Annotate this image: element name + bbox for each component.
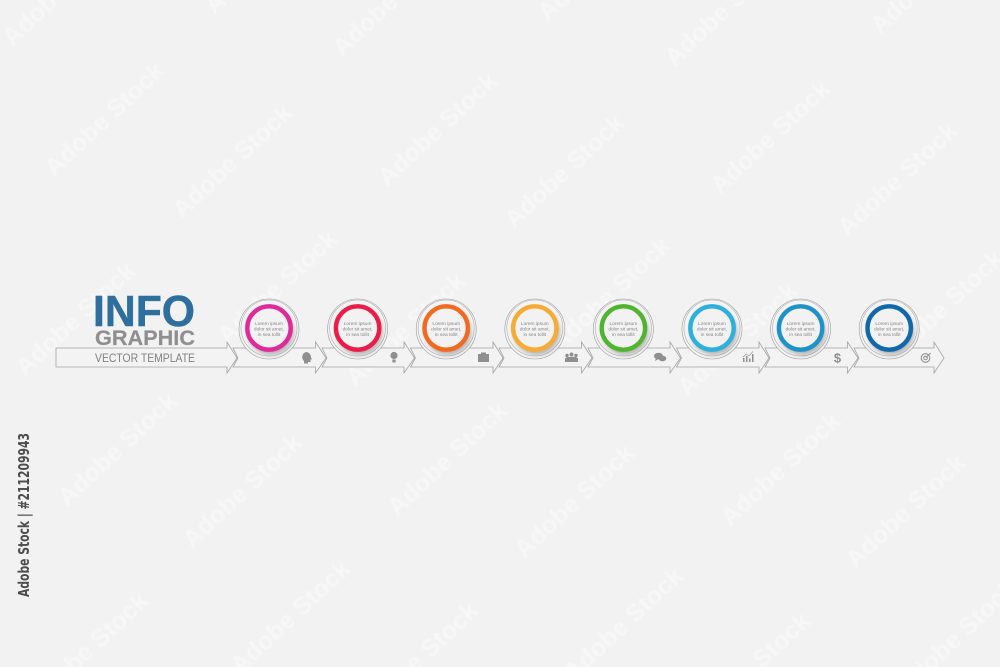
icon: briefcase [478, 352, 489, 362]
step 5 circle: in sea tollit [612, 332, 635, 338]
step 1 circle: in sea tollit [258, 332, 281, 338]
watermarks: Adobe Stock [52, 387, 183, 511]
step 5 circle: Lorem ipsum [610, 321, 637, 327]
watermarks: Adobe Stock [39, 57, 170, 181]
watermarks: Adobe Stock [167, 99, 298, 223]
step 7 circle: in sea tollit [789, 332, 813, 338]
step 7 circle [771, 299, 831, 359]
step 7 circle: Lorem ipsum [787, 321, 814, 327]
step 8 circle [859, 299, 919, 359]
watermarks: Adobe Stock [705, 75, 836, 199]
step 6 circle: Lorem ipsum [698, 321, 726, 327]
step 3 circle: dolor sit amet, [431, 326, 461, 332]
step 5 circle: dolor sit amet, [608, 326, 638, 332]
step 8 circle: in sea tollit [878, 332, 901, 338]
watermarks: Adobe Stock [340, 267, 471, 391]
arrow timeline [56, 342, 944, 373]
step 3 circle [416, 299, 476, 359]
watermarks: Adobe Stock [672, 277, 803, 401]
watermarks: Adobe Stock [832, 117, 963, 241]
watermarks: Adobe Stock [10, 257, 141, 381]
watermarks: Adobe Stock [382, 397, 513, 521]
step 8 circle: dolor sit amet, [874, 326, 904, 332]
step 6 circle [682, 299, 742, 359]
watermarks: Adobe Stock [499, 109, 630, 233]
step 8 circle: Lorem ipsum [875, 321, 903, 327]
icon: growth chart [743, 352, 754, 362]
icon: head [302, 352, 312, 364]
icon: dollar sign: $ [834, 350, 842, 366]
step 2 circle: in sea tollit [346, 332, 370, 338]
watermarks: Adobe Stock [372, 67, 503, 191]
step 4 circle: Lorem ipsum [521, 321, 549, 327]
step 6 circle: dolor sit amet, [697, 326, 727, 332]
step 2 circle: dolor sit amet, [343, 326, 373, 332]
step 5 circle [593, 299, 653, 359]
icon: light bulb [390, 352, 398, 362]
step 3 circle: Lorem ipsum [432, 321, 460, 327]
step 4 circle [505, 299, 565, 359]
watermarks: Adobe Stock [840, 449, 971, 573]
watermarks: Adobe Stock [212, 225, 343, 349]
step 1 circle: Lorem ipsum [255, 321, 283, 327]
title: INFO GRAPHIC: GRAPHIC [95, 327, 195, 350]
step 2 circle [328, 299, 388, 359]
step 1 circle: dolor sit amet, [254, 326, 284, 332]
step 4 circle: in sea tollit [523, 332, 547, 338]
title: INFO GRAPHIC: INFO [93, 287, 195, 336]
step 3 circle: in sea tollit [435, 332, 458, 338]
step 2 circle: Lorem ipsum [344, 321, 371, 327]
step 7 circle: dolor sit amet, [786, 326, 816, 332]
step 4 circle: dolor sit amet, [520, 326, 550, 332]
watermarks: Adobe Stock [545, 232, 676, 356]
subtitle: vector template: VECTOR TEMPLATE [95, 353, 195, 365]
stock id label: Adobe Stock | #211209943 [15, 433, 34, 597]
watermarks: Adobe Stock [509, 439, 640, 563]
icon: people [565, 352, 578, 362]
icon: target [921, 353, 930, 362]
step 1 circle [239, 299, 299, 359]
watermarks: Adobe Stock [177, 429, 308, 553]
watermarks: Adobe Stock [715, 407, 846, 531]
icon: speech bubbles [654, 353, 666, 361]
step 6 circle: in sea tollit [701, 332, 724, 338]
